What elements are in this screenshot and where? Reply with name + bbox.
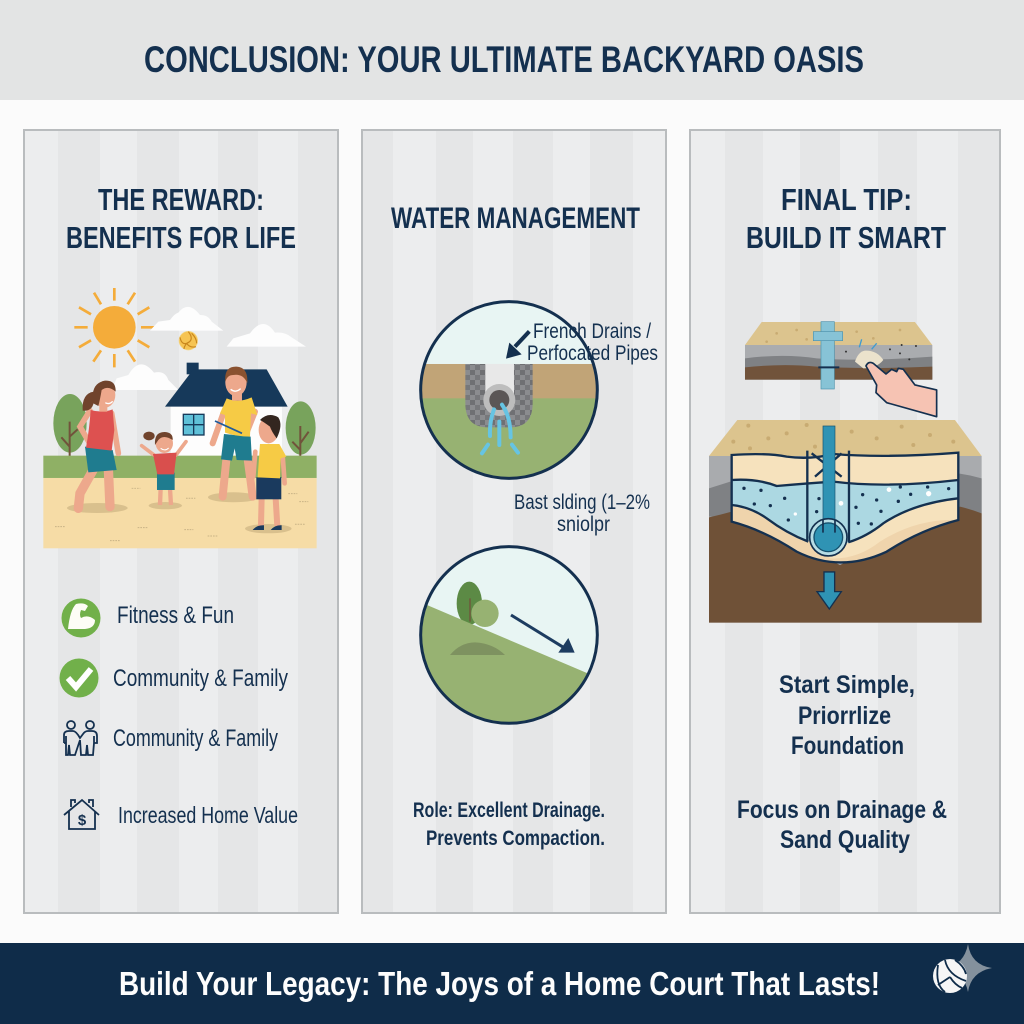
label: french drains: French Drains /	[533, 320, 651, 343]
panel: the reward	[24, 130, 338, 913]
heading: final tip: BUILD IT SMART	[746, 220, 946, 255]
large soil cross-section	[709, 420, 982, 623]
arrow: pointer to drain	[506, 331, 529, 359]
label: french drains	[527, 320, 658, 365]
icon: muscle arm	[62, 598, 100, 638]
benefit: fitness and fun	[62, 598, 234, 638]
house	[165, 363, 288, 456]
benefit: community and family (people)	[64, 721, 278, 755]
benefit: community and family (people): Community & Family	[113, 725, 278, 752]
heading: the reward: BENEFITS FOR LIFE	[66, 220, 296, 255]
icon: house with dollar sign	[64, 800, 99, 829]
icon: pointing hand	[866, 362, 937, 417]
label: french drains: Perfocated Pipes	[527, 342, 658, 365]
arrow: downhill slope	[511, 615, 575, 653]
label: sloping: Bast slding (1–2%	[514, 491, 650, 514]
text: start simple: Start Simple,	[779, 671, 915, 699]
diagram: slope circle	[417, 543, 603, 730]
benefit: fitness and fun: Fitness & Fun	[117, 602, 234, 629]
benefit: community and family	[60, 658, 288, 698]
person: mother	[78, 381, 118, 508]
text: start simple: Foundation	[791, 732, 904, 760]
heading: water management: WATER MANAGEMENT	[391, 202, 640, 235]
text: role: Role: Excellent Drainage.	[413, 799, 605, 822]
text: role	[413, 799, 605, 850]
heading: the reward: THE REWARD:	[98, 182, 264, 217]
trees	[53, 394, 316, 466]
illustration: family playing in backyard	[43, 288, 317, 548]
diagram: french drain circle	[417, 300, 603, 482]
diagram: ground layers	[709, 322, 982, 623]
footer band	[0, 943, 1024, 1024]
heading: final tip	[746, 182, 946, 255]
benefit: home value	[64, 800, 298, 829]
small soil cross-section	[745, 322, 932, 389]
icon: house with dollar sign: $	[78, 812, 87, 829]
person: father	[213, 367, 257, 497]
label: sloping	[514, 491, 650, 536]
panel: water management	[362, 130, 666, 913]
text: focus on drainage	[737, 796, 947, 854]
text: focus on drainage: Focus on Drainage &	[737, 796, 947, 824]
lawn and sand	[43, 456, 317, 548]
person: girl	[142, 432, 186, 505]
icon: sparkle and volleyball	[933, 944, 992, 993]
text: focus on drainage: Sand Quality	[780, 826, 910, 854]
heading: final tip: FINAL TIP:	[781, 182, 912, 217]
icon: check mark	[60, 658, 98, 698]
icon: two people holding hands	[64, 721, 97, 755]
icon: volleyball	[179, 331, 198, 350]
heading: the reward	[66, 182, 296, 255]
footer text: Build Your Legacy: The Joys of a Home Court That Lasts!	[119, 965, 880, 1002]
text: start simple	[779, 671, 915, 760]
benefit: community and family: Community & Family	[113, 665, 288, 692]
person: boy	[253, 415, 286, 530]
arrow: drainage down	[817, 572, 841, 609]
label: sloping: sniolpr	[557, 513, 610, 536]
benefit: home value: Increased Home Value	[118, 802, 298, 828]
text: role: Prevents Compaction.	[426, 827, 605, 850]
panel: final tip	[690, 130, 1000, 913]
text: start simple: Priorrlize	[798, 702, 891, 730]
icon: sun	[74, 288, 154, 367]
header band	[0, 0, 1024, 100]
clouds	[112, 307, 306, 390]
